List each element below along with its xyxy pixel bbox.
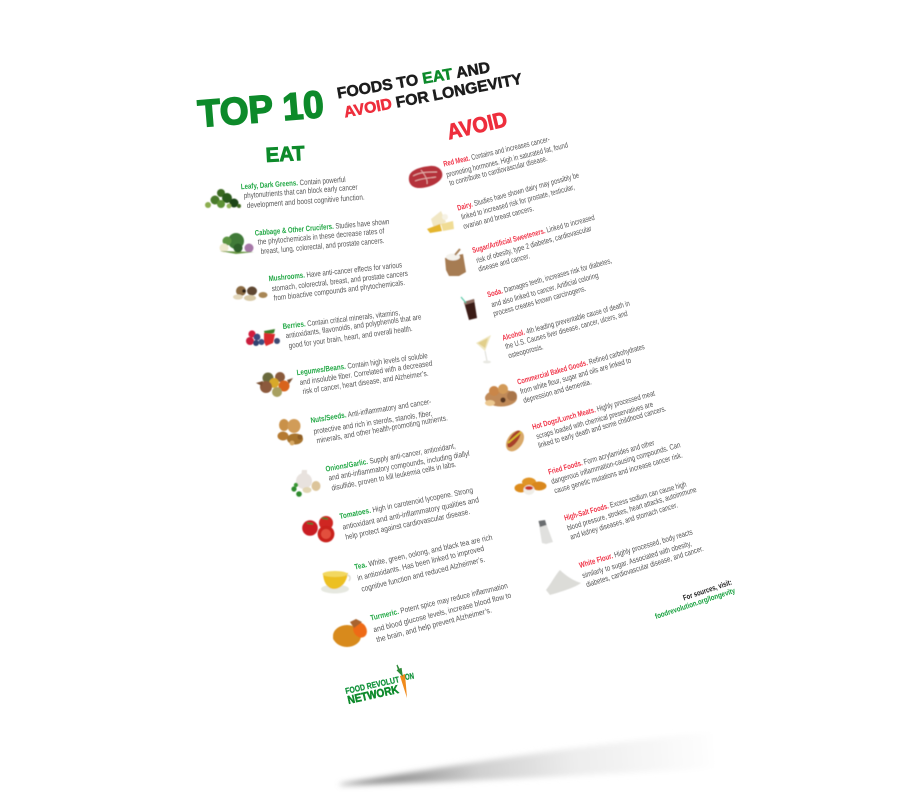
text: mushrooms <box>268 260 408 303</box>
heading: eat: EAT <box>265 142 306 167</box>
text: onions <box>325 441 470 493</box>
text: white flour: White Flour. Highly processed, body reacts <box>578 527 694 570</box>
text: tomatoes: Tomatoes. High in carotenoid lycopene. Strong <box>339 485 474 521</box>
text: nuts: protective and rich in sterols, stanols, fiber, <box>313 409 433 436</box>
text: berries: good for your brain, heart, and overall health. <box>288 324 413 350</box>
icon: soda glass <box>461 297 477 320</box>
text: dairy: Dairy. Studies have shown dairy may possibly be <box>456 171 580 213</box>
logo: food revolution network: ON <box>404 671 415 682</box>
text: leafy greens <box>241 175 365 210</box>
text: alcohol: the U.S. Causes liver disease, cancer, ulcers, and <box>504 309 629 351</box>
avoid item: dairy <box>427 171 580 233</box>
text: alcohol: Alcohol. 4th leading preventable cause of death in <box>501 299 631 343</box>
text: berries: antioxidants, flavonoids, and polyphenols that are <box>285 312 422 340</box>
avoid item: hot dogs <box>502 389 667 455</box>
logo: food revolution network: NETWORK <box>347 684 400 707</box>
icon: mushrooms <box>233 286 268 301</box>
text: cabbage: the phytochemicals in these decrease rates of <box>257 226 385 247</box>
text: mushrooms: stomach, colorectral, breast, and prostate cancers <box>271 269 408 293</box>
text: dairy: ovarian and breast cancers. <box>462 204 535 231</box>
avoid item: alcohol <box>476 299 631 363</box>
text: leafy greens: Leafy, Dark Greens. Contain powerful <box>241 175 346 191</box>
icon: red meat <box>409 166 442 188</box>
icon: fried foods <box>514 478 546 495</box>
eat item: onions <box>291 441 470 497</box>
text: legumes <box>296 351 433 396</box>
text: onions: disulfide, proven to kill leukemia cells in labs. <box>331 459 457 493</box>
title: avoid for longevity: AVOID FOR LONGEVITY <box>343 71 524 121</box>
text: alcohol <box>501 299 631 360</box>
text: baked goods: from white flour, sugar and oils are linked to <box>519 356 633 396</box>
text: hot dogs: linked to early death and some childhood cancers. <box>537 404 667 450</box>
text: baked goods: Commercial Baked Goods. Refined carbohydrates <box>516 342 646 387</box>
avoid item: high-salt foods <box>538 480 698 544</box>
icon: tea cup <box>321 571 350 594</box>
text: high-salt foods: and kidney diseases, and stomach cancer. <box>569 501 679 542</box>
text: berries <box>282 308 422 350</box>
sources note: For sources, visit: <box>682 578 733 602</box>
text: nuts: Nuts/Seeds. Anti-inflammatory and cancer- <box>310 397 432 425</box>
text: onions: Onions/Garlic. Supply anti-cancer, antioxidant, <box>325 441 456 474</box>
text: turmeric: Turmeric. Potent spice may reduce inflammation <box>369 581 509 623</box>
eat item: tomatoes <box>302 485 480 542</box>
text: fried foods: cause genetic mutations and increase cancer risk. <box>553 451 684 495</box>
text: white flour: diabetes, cardiovascular disease, and cancer. <box>585 544 705 589</box>
text: soda: and also linked to cancer. Artificial coloring <box>490 271 599 309</box>
text: legumes: Legumes/Beans. Contain high levels of soluble <box>296 351 428 377</box>
text: soda: Soda. Damages teeth, increases risk for diabetes, <box>486 256 613 299</box>
logo: food revolution network: FOOD REVOLUT <box>344 674 401 696</box>
icon: dairy <box>427 211 454 233</box>
icon: salt shaker <box>538 520 553 544</box>
icon: berries <box>246 329 280 346</box>
text: dairy: linked to increased risk for prostate, testicular, <box>460 183 576 222</box>
text: tea: Tea. White, green, oolong, and black tea are rich <box>354 533 493 572</box>
text: cabbage: breast, lung, colorectal, and prostate cancers. <box>260 236 385 256</box>
text: leafy greens: phytonutrients that can block early cancer <box>243 183 358 200</box>
text: tomatoes: antioxidant and anti-inflammatory qualities and <box>342 495 480 532</box>
avoid item: red meat <box>409 135 569 188</box>
text: baked goods: depression and dementia. <box>522 377 593 405</box>
eat item: nuts <box>278 397 448 445</box>
text: leafy greens: development and boost cognitive function. <box>246 193 365 210</box>
avoid item: fried foods <box>514 438 684 495</box>
title: top 10: TOP 10 <box>196 84 325 136</box>
text: mushrooms: Mushrooms. Have anti-cancer effects for various <box>268 260 403 283</box>
text: high-salt foods: blood pressure, strokes, heart attacks, autoimmune <box>566 485 698 533</box>
text: white flour: similarly to sugar. Associated with obesity, <box>581 539 693 580</box>
text: tea <box>354 533 493 594</box>
icon: martini glass <box>476 335 491 363</box>
text: fried foods: dangerous inflammation-causing compounds. Can <box>550 440 681 486</box>
text: high-salt foods: High-Salt Foods. Excess sodium can cause high <box>563 480 687 523</box>
title: foods to eat and: FOODS TO EAT AND <box>336 59 491 102</box>
ground shadow <box>340 731 720 785</box>
icon: white flour pile <box>546 570 581 595</box>
text: turmeric: the brain, and help prevent Alzheimer’s. <box>375 606 493 644</box>
eat item: turmeric <box>333 581 513 647</box>
text: mushrooms: from bioactive compounds and phytochemicals. <box>273 278 405 303</box>
icon: commercial baked goods <box>485 384 517 406</box>
text: tomatoes <box>339 485 480 542</box>
text: sugar: disease and cancer. <box>477 251 531 274</box>
avoid item: soda <box>461 256 613 320</box>
avoid item: sugar <box>445 213 596 276</box>
text: cabbage <box>254 217 390 256</box>
text: legumes: risk of cancer, heart disease, and Alzheimer’s. <box>302 369 429 396</box>
icon: turmeric <box>333 619 370 647</box>
text: soda: process creates known carcinogens. <box>492 284 587 318</box>
icon: leafy greens <box>205 189 241 208</box>
text: turmeric <box>369 581 513 644</box>
text: red meat: promoting hormones. High in saturated fat, found <box>445 140 569 179</box>
heading: avoid: AVOID <box>445 107 510 144</box>
eat item: mushrooms <box>233 260 408 303</box>
text: hot dogs: scraps loaded with chemical preservatives are <box>535 400 654 441</box>
text: hot dogs: Hot Dogs/Lunch Meats. Highly processed meat <box>531 389 656 432</box>
text: cabbage: Cabbage & Other Crucifers. Studies have shown <box>254 217 390 238</box>
text: tea: in antioxidants. Has been linked to improved <box>356 544 485 583</box>
icon: legumes and beans <box>256 372 293 397</box>
text: onions: and anti-inflammatory compounds, including diallyl <box>328 449 470 483</box>
text: red meat: to contribute to cardiovascular disease. <box>448 154 548 188</box>
text: turmeric: and blood glucose levels, increase blood flow to <box>372 591 513 634</box>
avoid item: baked goods <box>485 342 646 406</box>
icon: cabbage and crucifers <box>220 233 254 254</box>
text: sugar <box>471 213 596 274</box>
sources note: foodrevolution.org/longevity <box>654 586 737 621</box>
text: nuts: minerals, and other health-promoting nutrients. <box>316 413 448 445</box>
text: red meat: Red Meat. Contains and increases cancer- <box>442 135 551 169</box>
text: alcohol: osteoporosis. <box>507 342 544 360</box>
text: berries: Berries. Contain critical minerals, vitamins, <box>282 308 400 331</box>
text: dairy <box>456 171 580 231</box>
eat item: tea <box>321 533 493 594</box>
icon: nuts and seeds <box>278 419 303 445</box>
icon: tomatoes <box>302 516 334 542</box>
text: fried foods: Fried Foods. Form acrylamides and other <box>547 438 656 477</box>
text: tea: cognitive function and reduced Alzheimer’s. <box>360 555 486 594</box>
icon: carrot <box>397 665 407 698</box>
text: tomatoes: help protect against cardiovascular disease. <box>345 507 471 542</box>
icon: hot dog <box>502 427 528 455</box>
icon: sugar sack <box>445 249 466 276</box>
text: sugar: risk of obesity, type 2 diabetes, cardiovascular <box>475 224 593 265</box>
text: baked goods <box>516 342 646 405</box>
text: legumes: and insoluble fiber. Correlated with a decreased <box>299 359 433 387</box>
text: sugar: Sugar/Artificial Sweeteners. Linked to increased <box>471 213 596 255</box>
poster sheet <box>196 59 737 707</box>
eat item: leafy greens <box>205 175 365 210</box>
eat item: legumes <box>256 351 433 397</box>
icon: onions and garlic <box>291 470 320 497</box>
text: nuts <box>310 397 448 445</box>
avoid item: white flour <box>546 527 705 595</box>
text: soda <box>486 256 613 318</box>
logo: food revolution network <box>344 665 415 707</box>
eat item: cabbage <box>220 217 390 256</box>
eat item: berries <box>246 308 422 350</box>
